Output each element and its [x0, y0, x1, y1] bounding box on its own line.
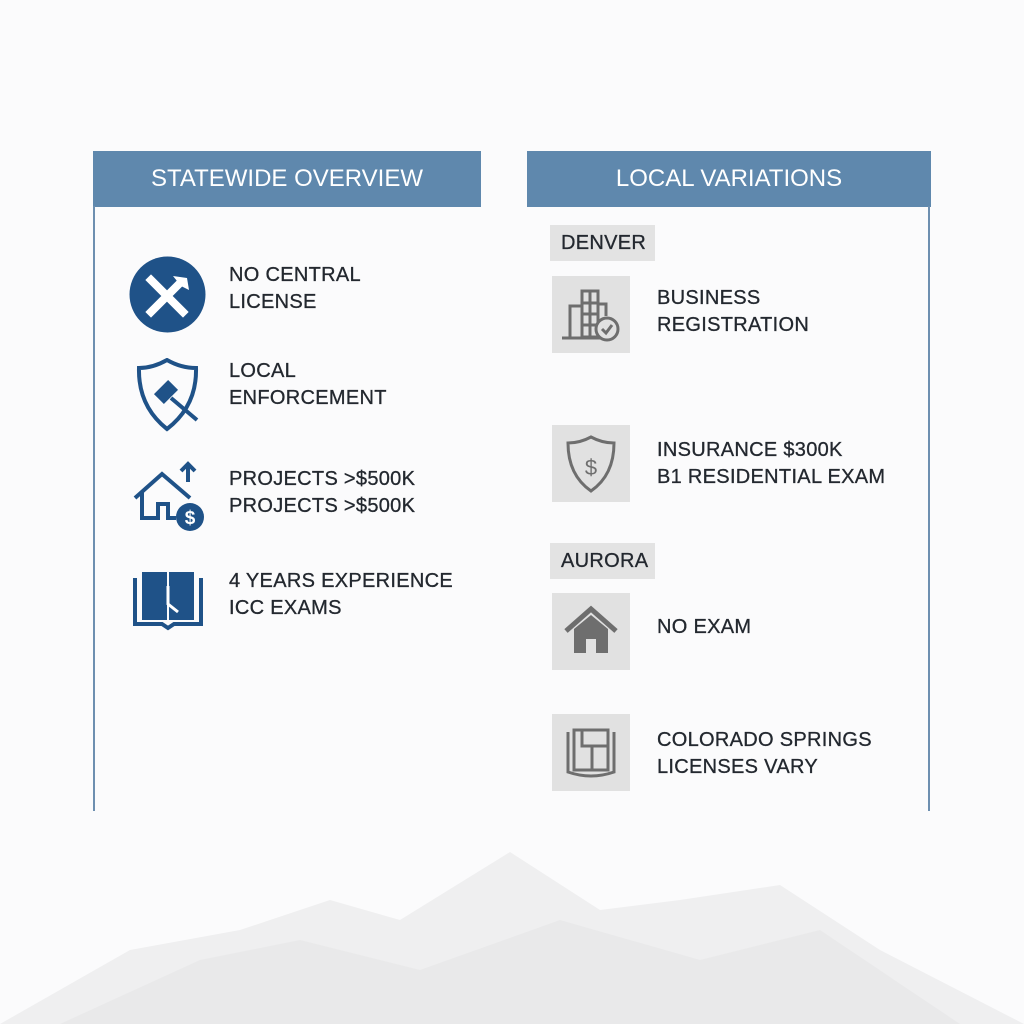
text: projects: PROJECTS >$500K — [229, 468, 415, 490]
text: local enforcement — [229, 360, 387, 409]
icon: book clock — [133, 572, 203, 630]
text: projects — [229, 468, 415, 517]
tag: aurora: AURORA — [561, 550, 648, 572]
text: insurance: INSURANCE $300K — [657, 439, 843, 461]
icon: house with dollar — [134, 461, 204, 531]
text: local enforcement: ENFORCEMENT — [229, 387, 387, 409]
icon: tools — [130, 256, 206, 332]
tag: denver — [550, 225, 655, 261]
text: business registration: BUSINESS — [657, 287, 761, 309]
background mountains — [0, 852, 1024, 1024]
text: business registration: REGISTRATION — [657, 314, 809, 336]
tag: denver: DENVER — [561, 232, 646, 254]
heading: local variations: LOCAL VARIATIONS — [616, 165, 842, 192]
text: insurance: B1 RESIDENTIAL EXAM — [657, 466, 885, 488]
text: business registration — [657, 287, 809, 336]
heading: local variations — [527, 151, 931, 207]
text: local enforcement: LOCAL — [229, 360, 296, 382]
text: colorado springs: COLORADO SPRINGS — [657, 729, 872, 751]
text: experience: 4 YEARS EXPERIENCE — [229, 570, 453, 592]
tag: aurora — [550, 543, 655, 579]
text: projects: PROJECTS >$500K — [229, 495, 415, 517]
text: no central license: NO CENTRAL — [229, 264, 361, 286]
heading: statewide overview — [93, 151, 481, 207]
text: insurance — [657, 439, 885, 488]
text: experience — [229, 570, 453, 619]
icon: shield gavel — [136, 358, 198, 432]
icon: shield dollar — [552, 425, 630, 502]
text: colorado springs: LICENSES VARY — [657, 756, 818, 778]
icon: home — [552, 593, 630, 670]
text: no exam: NO EXAM — [657, 616, 751, 638]
text: experience: ICC EXAMS — [229, 597, 342, 619]
heading: statewide overview: STATEWIDE OVERVIEW — [151, 165, 423, 192]
icon: building check — [552, 276, 630, 353]
icon: map — [552, 714, 630, 791]
text: no central license — [229, 264, 361, 313]
icon: shield dollar: $ — [585, 455, 597, 480]
text: no central license: LICENSE — [229, 291, 317, 313]
icon: house with dollar: $ — [185, 508, 196, 529]
text: colorado springs — [657, 729, 872, 778]
